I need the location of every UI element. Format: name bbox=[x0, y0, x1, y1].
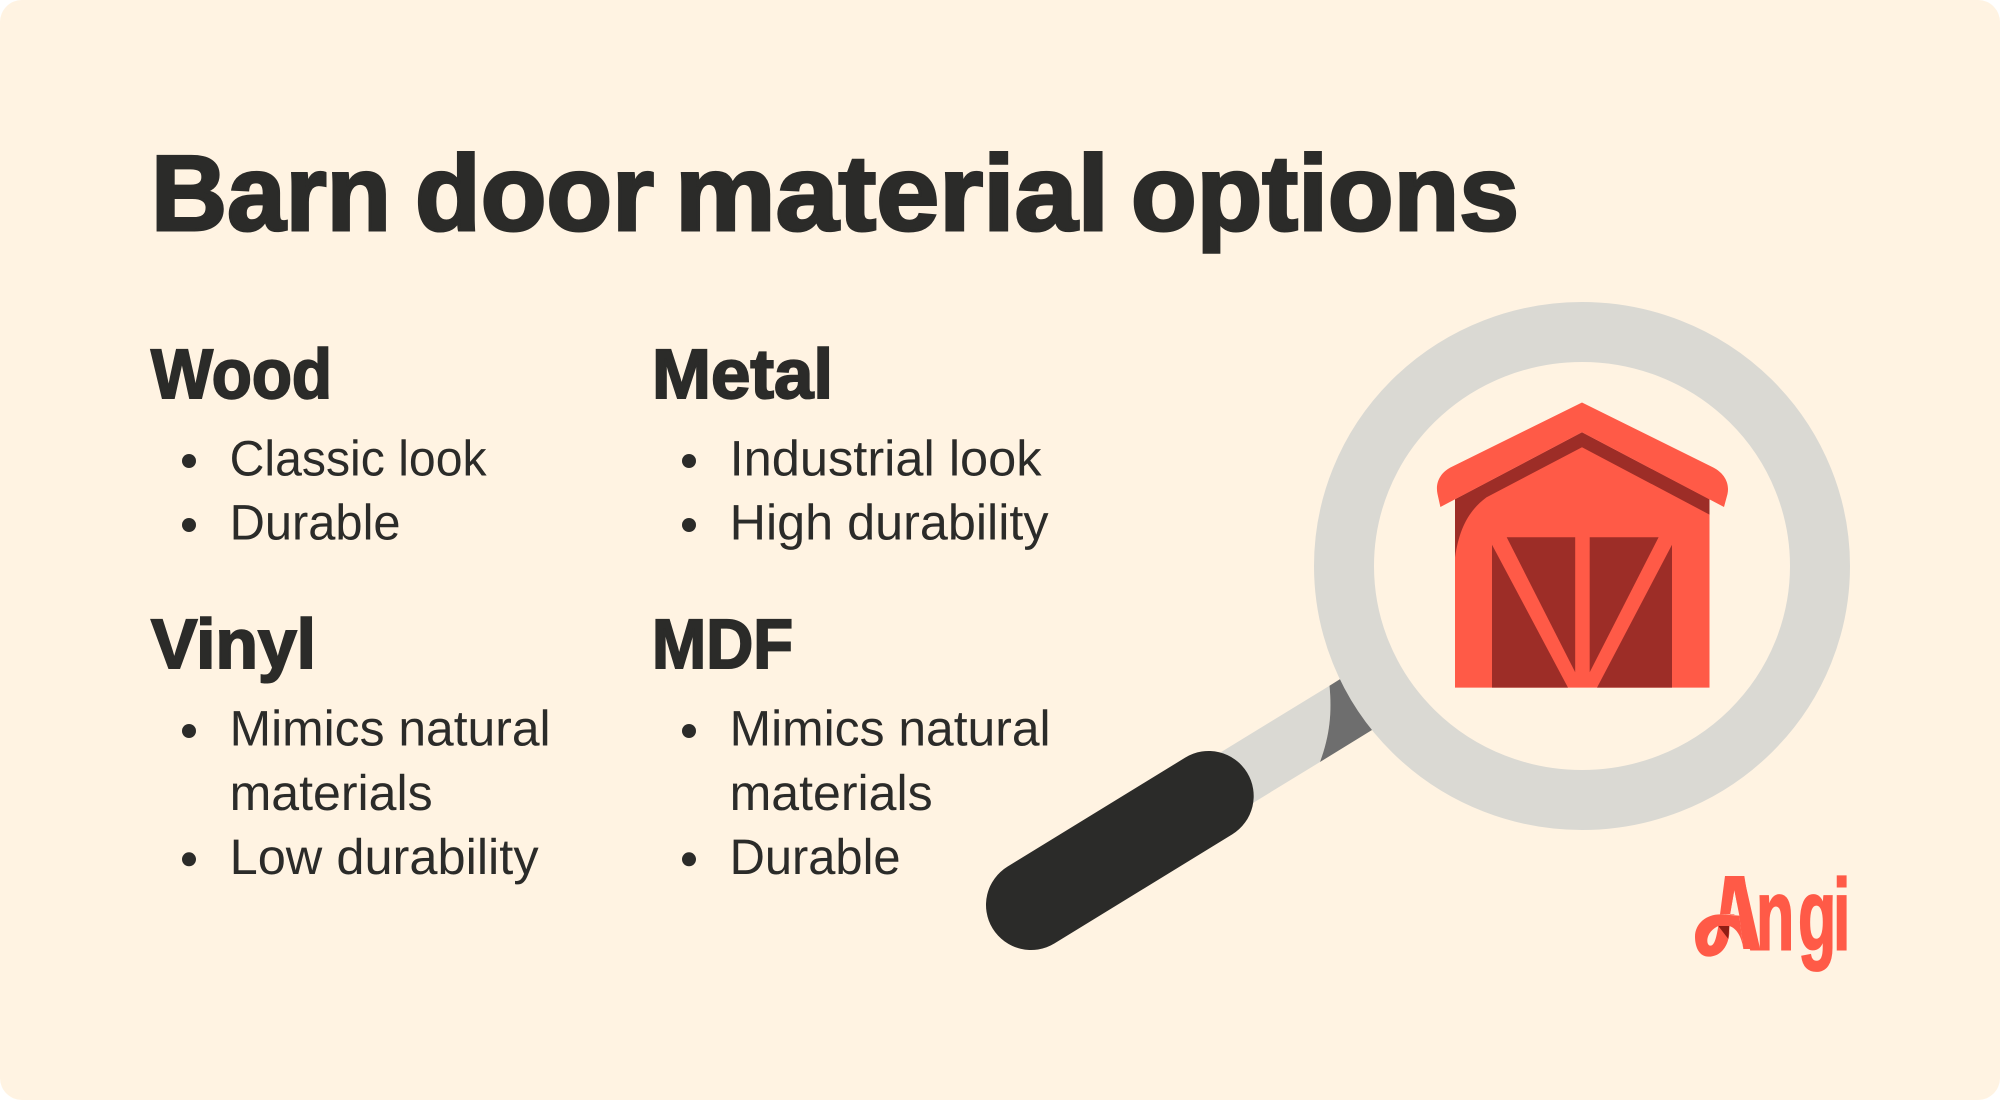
logo wordmark: Angi bbox=[1716, 860, 1850, 972]
title: material bbox=[675, 133, 1109, 253]
barn roof shadow bbox=[1455, 432, 1710, 558]
heading: vinyl: Vinyl bbox=[151, 605, 316, 683]
list: metal properties: High durability bbox=[730, 494, 1049, 550]
list: mdf properties: Durable bbox=[730, 829, 901, 885]
list: metal properties bbox=[682, 431, 1049, 550]
barn roof bbox=[1437, 402, 1728, 507]
title: door bbox=[415, 133, 654, 253]
list: mdf properties bbox=[682, 701, 1051, 885]
list: vinyl properties: Mimics natural bbox=[230, 701, 551, 757]
magnifier shaft bbox=[1200, 686, 1330, 817]
list: wood properties: Classic look bbox=[230, 431, 488, 487]
list: wood properties bbox=[182, 431, 488, 550]
list: vinyl properties bbox=[182, 701, 551, 885]
title: options bbox=[1131, 133, 1519, 253]
barn body bbox=[1455, 432, 1710, 688]
magnifier ring bbox=[1344, 332, 1820, 800]
icon: red barn bbox=[1437, 402, 1728, 688]
title: Barn bbox=[151, 133, 391, 253]
title bbox=[151, 133, 1519, 253]
panel: vinyl bbox=[151, 605, 551, 885]
magnifier shaft shadow bbox=[1320, 676, 1385, 762]
heading: mdf: MDF bbox=[652, 605, 793, 683]
panel: mdf bbox=[652, 605, 1051, 885]
panel: wood bbox=[151, 335, 488, 550]
logo letter A with swash bbox=[1685, 876, 1756, 965]
heading: metal: Metal bbox=[652, 335, 833, 413]
list: wood properties: Durable bbox=[230, 494, 401, 550]
list: vinyl properties: materials bbox=[230, 765, 433, 821]
logo: Angi bbox=[1685, 860, 1850, 972]
list: vinyl properties: Low durability bbox=[230, 829, 539, 885]
list: metal properties: Industrial look bbox=[730, 431, 1043, 487]
magnifier handle bbox=[1031, 796, 1209, 905]
list: mdf properties: Mimics natural bbox=[730, 701, 1051, 757]
icon: magnifying glass bbox=[1031, 332, 1820, 905]
heading: wood: Wood bbox=[151, 335, 332, 413]
barn door panels bbox=[1492, 537, 1672, 688]
list: mdf properties: materials bbox=[730, 765, 933, 821]
panel: metal bbox=[652, 335, 1049, 550]
